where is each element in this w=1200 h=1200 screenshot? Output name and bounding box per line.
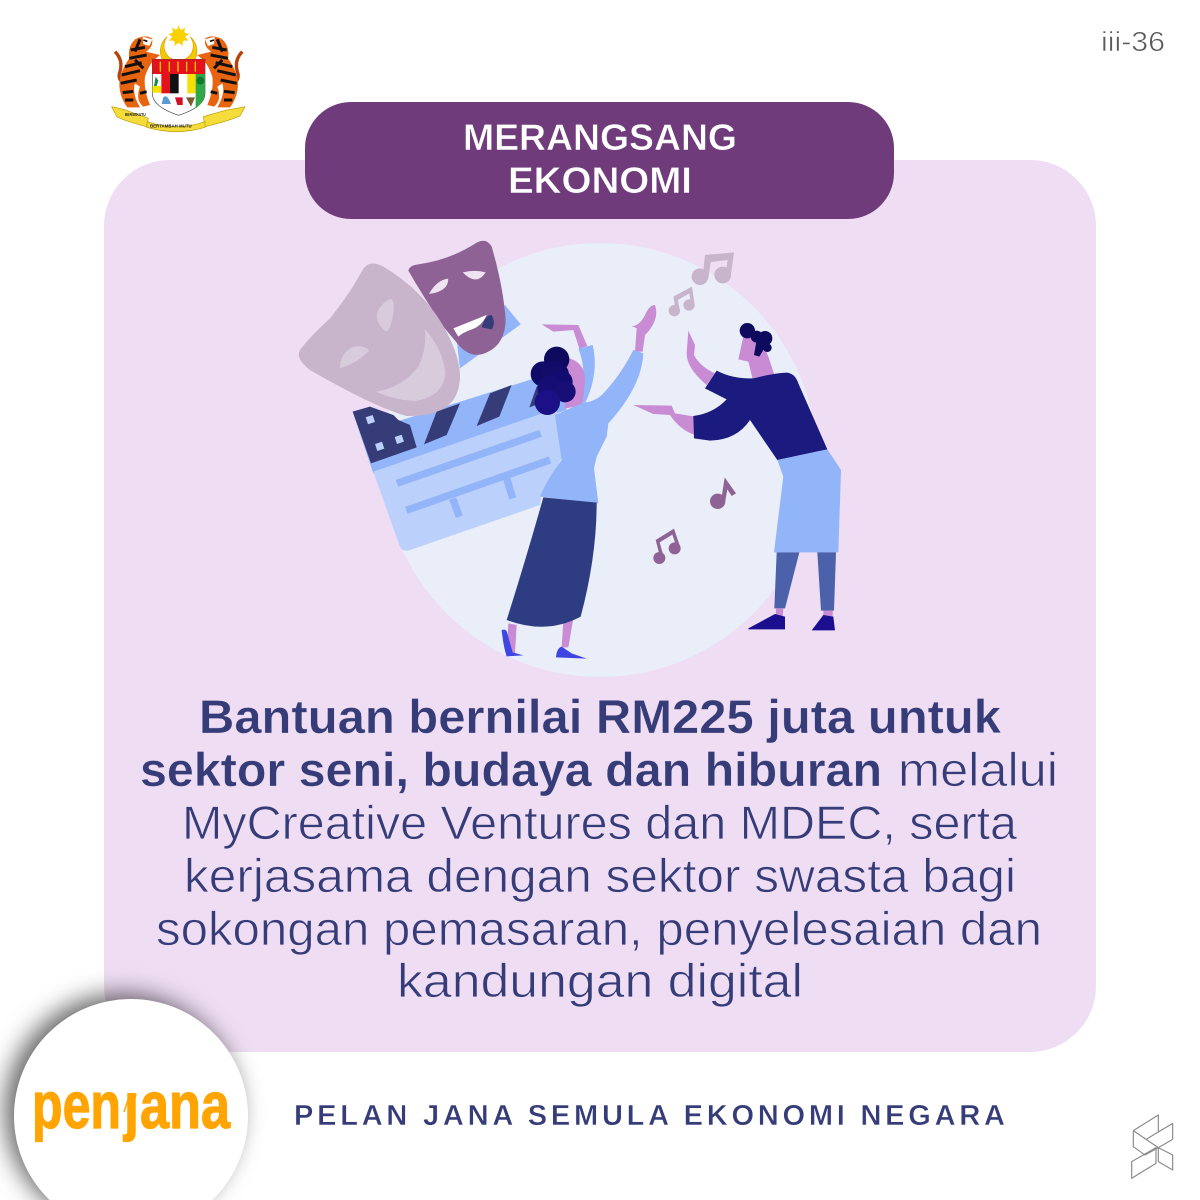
- body text: [140, 690, 1058, 1007]
- right tiger: [197, 36, 242, 107]
- penjana wordmark: [32, 1068, 231, 1142]
- penjana wordmark: j: [122, 1068, 139, 1142]
- heading pill: Merangsang Ekonomi: [305, 102, 894, 219]
- sad mask: [408, 241, 506, 355]
- body text: kerjasama dengan sektor swasta bagi: [184, 849, 1016, 902]
- crescent and sun: [160, 25, 197, 69]
- single note: [710, 477, 736, 509]
- large beamed note: [692, 252, 734, 285]
- body text: sektor seni, budaya dan hiburan: [140, 743, 882, 796]
- body text: sokongan pemasaran, penyelesaian dan: [156, 902, 1042, 955]
- penjana wordmark: pen: [32, 1068, 121, 1142]
- page number: iii-36: [1101, 26, 1165, 57]
- motto ribbon: BERTAMBAH MUTU: [150, 124, 192, 130]
- clapperboard: [353, 305, 567, 551]
- penjana wordmark: ana: [140, 1068, 231, 1142]
- happy mask: [299, 263, 460, 416]
- hair: [740, 323, 772, 357]
- panel: lilac background: [104, 160, 1096, 1052]
- icon: Malaysian coat of arms: [112, 25, 245, 132]
- penjana logo circle: [14, 999, 248, 1200]
- body text: Bantuan bernilai RM225 juta untuk: [199, 690, 1002, 743]
- masks: [299, 241, 506, 416]
- left tiger: [115, 36, 160, 107]
- shield: [152, 59, 205, 115]
- motto ribbon: [112, 107, 245, 132]
- music notes: [653, 252, 736, 564]
- heading pill: Merangsang Ekonomi: MERANGSANG: [463, 117, 737, 158]
- beamed purple note: [653, 529, 681, 564]
- small beamed note: [669, 287, 695, 316]
- motto ribbon: BERSEKUTU: [125, 112, 146, 117]
- body text: MyCreative Ventures dan MDEC, serta: [182, 796, 1018, 849]
- body text: melalui: [898, 743, 1058, 796]
- body text: kandungan digital: [397, 954, 803, 1007]
- hair: [531, 347, 576, 415]
- background circle: [383, 243, 817, 677]
- heading pill: Merangsang Ekonomi: EKONOMI: [508, 160, 692, 201]
- footer tagline: PELAN JANA SEMULA EKONOMI NEGARA: [294, 1100, 1005, 1132]
- icon: corner S logo: [1132, 1115, 1173, 1178]
- illustration: dancers, masks and clapperboard: [299, 241, 841, 677]
- woman dancer: [502, 305, 656, 659]
- man dancer: [633, 323, 841, 630]
